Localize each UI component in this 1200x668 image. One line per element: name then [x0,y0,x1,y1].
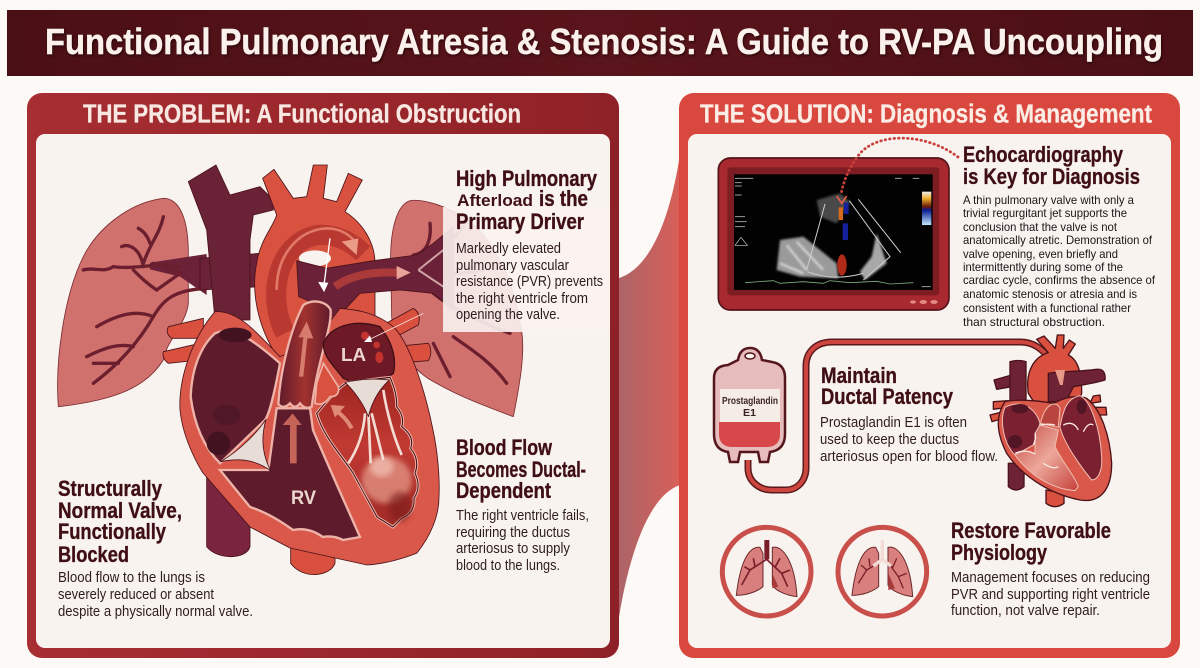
callout: ductal patency [820,363,998,465]
callout: ductal patency: Maintain [821,363,897,388]
callout: restore physiology: Restore Favorable [951,518,1111,543]
callout: structurally normal valve: Structurally [58,476,163,501]
dotted arrow to valve [841,138,958,194]
callout: high pulmonary afterload [456,166,603,323]
left ventricle [317,377,418,527]
callout: restore physiology: Management focuses on reducing [951,569,1150,586]
callout: restore physiology: PVR and supporting right ventricle [951,586,1150,603]
prostaglandin bag: E1 [743,407,756,419]
left atrium [323,323,395,382]
callout: echocardiography [963,142,1156,329]
right lung [391,200,523,417]
tricuspid valve [221,419,271,471]
lungs icon: before [722,527,811,616]
callout: high pulmonary afterload: is the [539,186,588,211]
bag label: Prostaglandin [722,395,778,407]
heart wall [180,308,439,565]
callout: restore physiology [951,518,1150,619]
callout: ductal dependent: Becomes Ductal- [456,457,586,482]
callout: echocardiography: cardiac cycle, confirms the absence of [963,274,1156,287]
panel heading: the problem: THE PROBLEM: A Functional Obstruction [83,100,521,128]
callout: echocardiography: intermittently during some of the [963,261,1123,274]
panel: the solution [679,93,1180,658]
right ventricle [220,408,360,540]
callout: echocardiography: consistent with a functional rather [963,302,1131,315]
right atrium [191,328,280,463]
LV flow arrow [331,405,352,428]
callout: echocardiography: Echocardiography [963,142,1124,167]
echo image [735,178,931,287]
callout: structurally normal valve: Blocked [58,542,129,567]
label: RV: RV [291,488,316,509]
infusion tube [748,342,1050,490]
pulmonary veins [163,308,431,363]
callout: structurally normal valve: Blood flow to the lungs is [58,569,205,586]
title banner [7,10,1193,76]
lungs icon: after [838,527,927,616]
callout: ductal dependent: arteriosus to supply [456,540,570,557]
callout: restore physiology: Physiology [951,540,1048,565]
callout: high pulmonary afterload: High Pulmonary [456,166,598,191]
callout: structurally normal valve: Normal Valve, [58,498,182,523]
callout: ductal patency: Ductal Patency [821,384,954,409]
callout: ductal dependent [456,435,589,574]
callout: ductal patency: arteriosus open for blood flow. [820,448,998,465]
callout: ductal dependent: The right ventricle fails, [456,507,589,524]
callout: echocardiography: than structural obstruction. [963,316,1105,329]
panel: the problem [27,93,619,658]
left lung [58,198,207,407]
descending vessels [207,457,335,575]
pulmonary trunk and right branch [297,227,453,318]
callout: structurally normal valve: despite a physically normal valve. [58,603,253,620]
ultrasound monitor [718,158,949,310]
callout: ductal dependent: blood to the lungs. [456,557,560,574]
callout: high pulmonary afterload: Primary Driver [456,209,584,234]
RV flow arrow [283,413,302,463]
callout: echocardiography: is Key for Diagnosis [963,164,1140,189]
left pulmonary artery [200,253,260,290]
callout: echocardiography: conclusion that the valve is not [963,221,1118,234]
callout: high pulmonary afterload: Afterload [457,192,533,210]
illustration: heart and lungs [58,165,523,575]
callout: high pulmonary afterload: opening the valve. [456,306,560,323]
connector funnel between panels [619,154,680,617]
callout: ductal dependent: Dependent [456,478,552,503]
callout: high pulmonary afterload: resistance (PVR) prevents [456,273,603,290]
pulmonary outflow tract [278,301,331,408]
aortic outflow [315,363,339,404]
callout: high pulmonary afterload: Markedly elevated [456,240,561,257]
callout: echocardiography: trivial regurgitant jet supports the [963,207,1127,220]
text backing: afterload [443,207,610,332]
callout: high pulmonary afterload: the right ventricle from [456,290,588,307]
callout: ductal patency: used to keep the ductus [820,431,959,448]
callout: structurally normal valve: severely reduced or absent [58,586,215,603]
callout: ductal dependent: requiring the ductus [456,524,570,541]
small heart illustration [990,335,1112,507]
white arrow: pulmonary valve [319,238,330,291]
callout: ductal dependent: Blood Flow [456,435,553,460]
prostaglandin bag [714,348,785,462]
callout: echocardiography: A thin pulmonary valve with only a [963,194,1135,207]
label: LA: LA [341,345,366,365]
callout: echocardiography: valve opening, even briefly and [963,248,1118,261]
callout: echocardiography: anatomically atretic. Demonstration of [963,234,1153,247]
callout: structurally normal valve: Functionally [58,519,167,544]
callout: structurally normal valve [58,476,253,620]
callout: echocardiography: anatomic stenosis or atresia and is [963,288,1137,301]
superior vena cava [188,165,274,320]
LA spots and arrow [361,313,423,363]
callout: high pulmonary afterload: pulmonary vascular [456,257,569,274]
aorta [255,165,375,370]
callout: restore physiology: function, not valve repair. [951,602,1100,619]
callout: ductal patency: Prostaglandin E1 is often [820,414,967,431]
